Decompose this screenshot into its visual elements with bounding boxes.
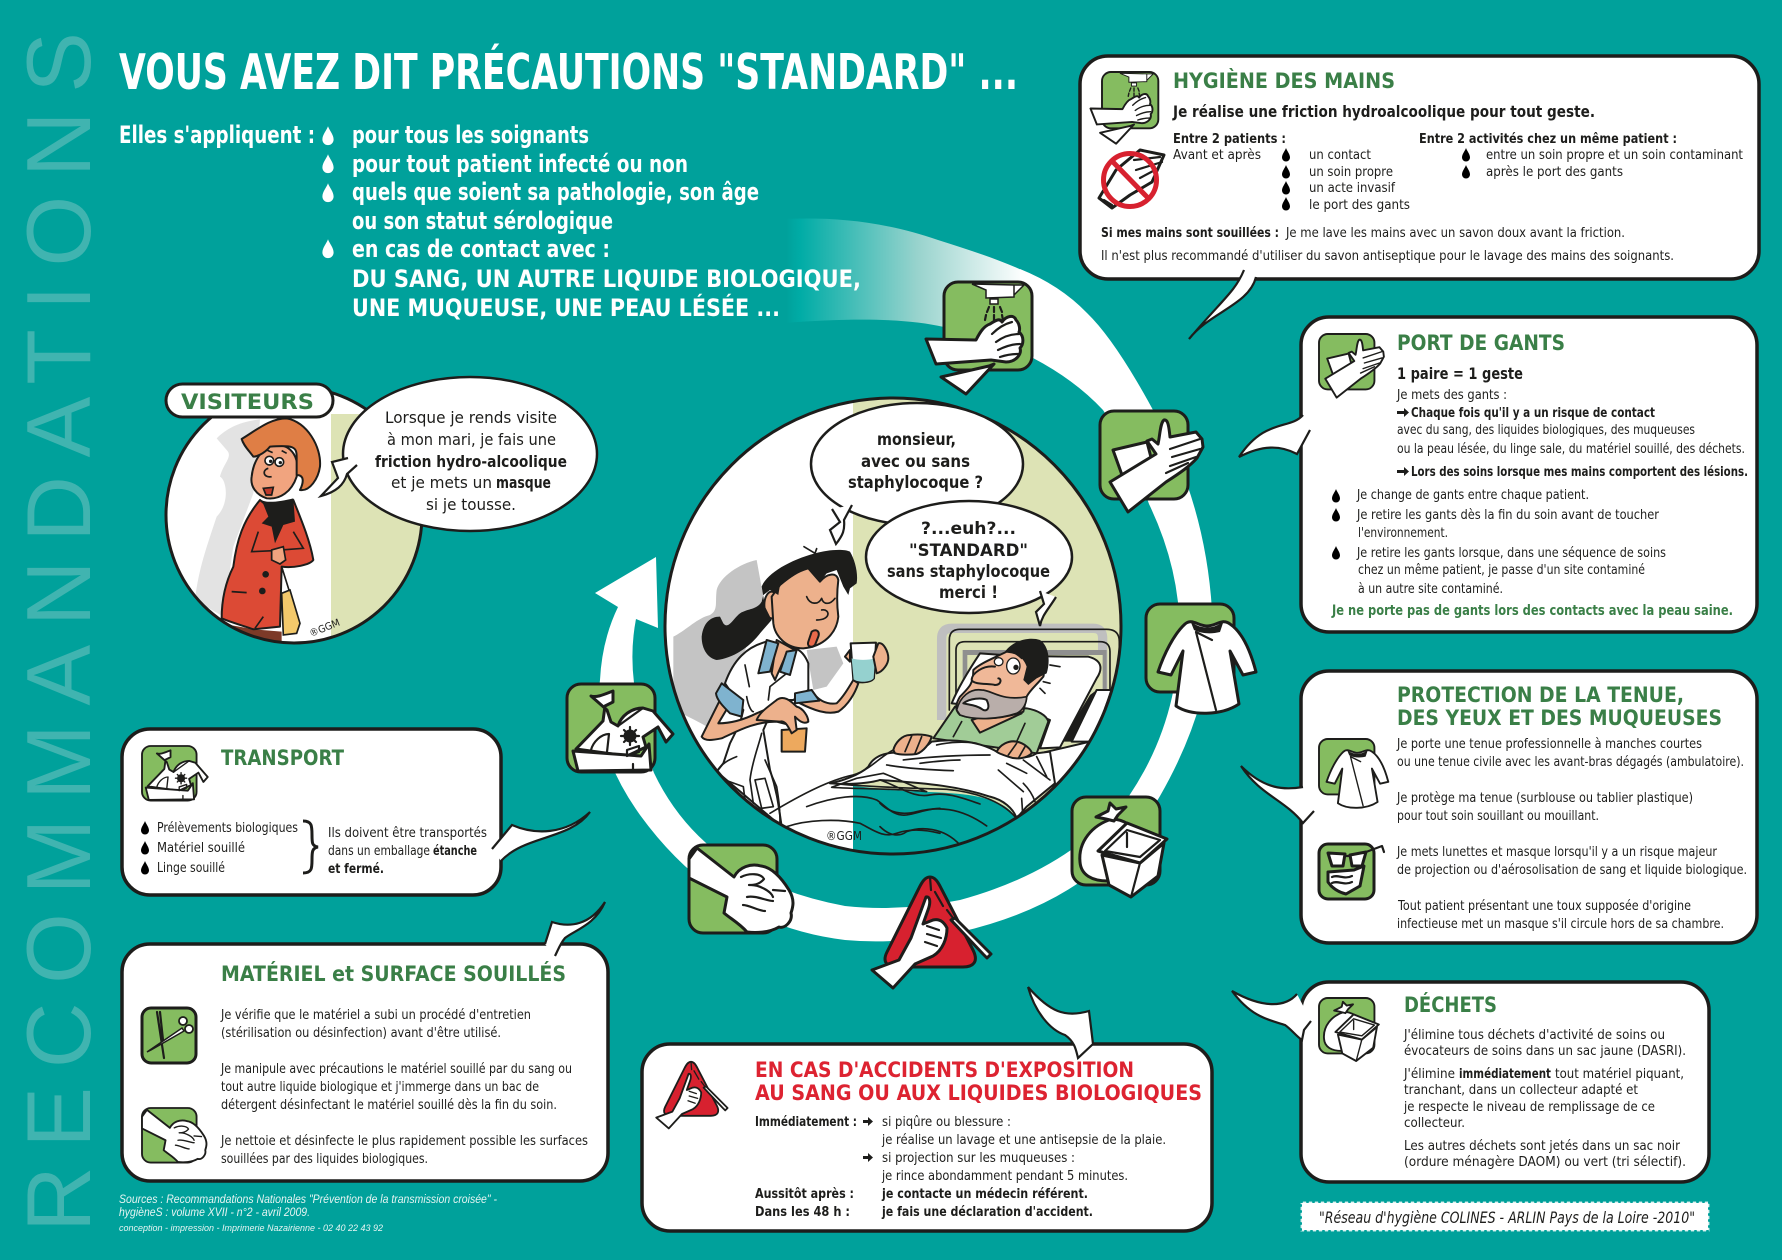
text block: waste rules: J'élimine [1403,1066,1455,1082]
text block: glove rules: Je change de gants entre chaque patient. [1356,487,1589,503]
text block: waste rules: collecteur. [1404,1115,1465,1131]
panel: déchets [1232,982,1709,1182]
text block: packaging: étanche [433,843,477,859]
text block: waste rules: tout matériel piquant, [1555,1066,1684,1082]
text block: items [141,820,298,876]
text block: equipment rules: Je vérifie que le matériel a subi un procédé d'entretien [220,1007,531,1023]
speech bubble: nurse: avec ou sans [861,452,970,472]
sources: Sources : Recommandations Nationales "Prévention de la transmission croisée" - [119,1194,497,1206]
text block: procedure: je rince abondamment pendant 5 minutes. [881,1168,1128,1184]
brace [303,821,318,873]
heading: MATÉRIEL et SURFACE SOUILLÉS [221,961,566,986]
icon: transport [142,746,208,801]
text block: protection rules: pour tout soin souillant ou mouillant. [1397,808,1599,824]
text block: entre 2 activités [1419,131,1743,180]
ring icon: coat [1146,604,1256,713]
text block: equipment rules: Je nettoie et désinfecte le plus rapidement possible les surfaces [220,1133,588,1149]
circular arrow: white ring with arrowhead [595,269,1212,941]
heading: EN CAS D'ACCIDENTS D'EXPOSITION [755,1058,1134,1082]
ring icon: gloves [1100,411,1203,512]
text block: protection rules: Je mets lunettes et masque lorsqu'il y a un risque majeur [1396,844,1717,860]
panel: protection de la tenue [1241,671,1757,943]
icon: no jewellery hands prohibited [1099,150,1164,208]
speech bubble: visitor [321,377,597,531]
text block: soiled hands: Si mes mains sont souillées : [1101,225,1279,241]
text block: when to wear: Je mets des gants : [1396,387,1507,403]
text block: waste rules: tranchant, dans un collecteur adapté et [1404,1082,1638,1098]
text block: equipment rules: tout autre liquide biologique et j'immerge dans un bac de [221,1079,539,1095]
credit box [1301,1202,1709,1231]
text block: waste rules: (ordure ménagère DAOM) ou vert (tri sélectif). [1404,1154,1686,1170]
speech bubble: nurse: monsieur, [877,430,956,450]
speech bubble: visitor: si je tousse. [426,495,516,514]
speech bubble: patient: merci ! [939,583,998,603]
text block: when to wear: Chaque fois qu'il y a un risque de contact [1411,405,1655,421]
text block: items: Linge souillé [157,860,225,876]
text block: protection rules [1396,736,1747,932]
ring icon: transport [567,684,673,772]
text block: protection rules: Je porte une tenue professionnelle à manches courtes [1396,736,1702,752]
speech bubble: patient: sans staphylocoque [887,562,1050,582]
text block: equipment rules: détergent désinfectant le matériel souillé dès la fin du soin. [221,1097,557,1113]
text block: when to wear: avec du sang, des liquides biologiques, des muqueuses [1397,422,1695,438]
heading: HYGIÈNE DES MAINS [1173,68,1395,93]
sources: conception - impression - Imprimerie Nazairienne - 02 40 22 43 92 [119,1223,384,1234]
text block: procedure: je fais une déclaration d'accident. [881,1204,1093,1220]
text block: equipment rules: souillées par des liquides biologiques. [221,1151,428,1167]
intro list: DU SANG, UN AUTRE LIQUIDE BIOLOGIQUE, [352,265,861,293]
intro list: ou son statut sérologique [352,207,613,235]
ring icon: cleaning hand [689,845,793,933]
intro list: Elles s'appliquent : [119,121,315,149]
text block: items: Matériel souillé [157,840,245,856]
panel: transport [122,729,590,895]
text block: soiled hands: Il n'est plus recommandé d'utiliser du savon antiseptique pour le lavage des mains des soignants. [1101,248,1674,264]
intro list: en cas de contact avec : [352,235,610,263]
text block: 1 paire = 1 geste: 1 paire = 1 geste [1397,364,1523,383]
heading [755,1058,1202,1105]
text block: entre 2 patients: un soin propre [1309,164,1393,180]
copyright mark: ®GGM [308,618,342,640]
icon: gloves [1319,334,1384,398]
text block: entre 2 patients: un contact [1309,147,1371,163]
ring icon: exposure accident [872,877,991,988]
text block: waste rules: je respecte le niveau de remplissage de ce [1403,1099,1655,1115]
text block: items: Prélèvements biologiques [157,820,298,836]
heading: PORT DE GANTS [1397,331,1565,355]
heading: DÉCHETS [1404,992,1497,1017]
circular arrow: swoosh from the intro text [784,218,1034,358]
text block: main rule: Je réalise une friction hydroalcoolique pour tout geste. [1172,102,1595,121]
icon: exposure accident [656,1062,728,1128]
speech bubble: patient [866,501,1072,626]
text block: entre 2 patients [1173,131,1410,213]
icon: glasses and mask [1319,844,1384,899]
text block: procedure: Aussitôt après : [755,1186,854,1202]
text block: protection rules: Je protège ma tenue (surblouse ou tablier plastique) [1396,790,1693,806]
intro list: quels que soient sa pathologie, son âge [352,178,759,206]
icon: waste [1319,998,1379,1061]
text block: waste rules: immédiatement [1459,1066,1551,1082]
text block: packaging [328,825,487,877]
speech bubble: nurse [811,403,1023,544]
text block: glove rules: Je retire les gants lorsque, dans une séquence de soins [1356,545,1666,561]
panel: hygiène des mains [1080,56,1759,339]
text block: procedure: Immédiatement : [755,1114,857,1130]
icon: coat [1319,739,1388,808]
text block: entre 2 activités: entre un soin propre et un soin contaminant [1486,147,1743,163]
heading [1397,683,1722,730]
text block: packaging: dans un emballage [328,843,430,859]
text block: waste rules [1403,1027,1686,1170]
sources [119,1194,497,1234]
text block: glove rules: l'environnement. [1358,525,1448,541]
text block: glove rules: chez un même patient, je passe d'un site contaminé [1358,562,1645,578]
heading: TRANSPORT [221,746,345,770]
text block: equipment rules [220,1007,588,1167]
text block: equipment rules: Je manipule avec précautions le matériel souillé par du sang ou [220,1061,572,1077]
text block: protection rules: Tout patient présentant une toux supposée d'origine [1397,898,1691,914]
heading: PROTECTION DE LA TENUE, [1397,683,1684,707]
text block: procedure: si piqûre ou blessure : [882,1114,1011,1130]
text block: entre 2 patients: un acte invasif [1309,180,1396,196]
text block: entre 2 patients: Entre 2 patients : [1173,131,1286,147]
text block: waste rules: Les autres déchets sont jetés dans un sac noir [1404,1138,1680,1154]
intro list [119,121,861,322]
speech bubble: visitor: masque [496,473,551,492]
speech bubble: patient: "STANDARD" [909,541,1028,561]
speech bubble: visitor: Lorsque je rends visite [385,408,557,427]
intro list: pour tous les soignants [352,121,589,149]
speech bubble: nurse: staphylocoque ? [848,473,983,493]
text block: soiled hands: Je me lave les mains avec un savon doux avant la friction. [1285,225,1625,241]
title: VOUS AVEZ DIT PRÉCAUTIONS "STANDARD" ... [119,42,1018,101]
intro list: pour tout patient infecté ou non [352,150,688,178]
icon: hand washing [1090,72,1158,144]
text block: packaging: et fermé. [328,861,384,877]
text block: procedure: Dans les 48 h : [755,1204,850,1220]
icon: instruments [142,1008,196,1063]
text block: procedure: si projection sur les muqueuses : [882,1150,1075,1166]
speech bubble: visitor: à mon mari, je fais une [387,430,556,449]
sources: hygièneS : volume XVII - n°2 - avril 2009. [119,1207,310,1219]
text block: entre 2 patients: le port des gants [1309,197,1410,213]
text block: procedure: je contacte un médecin référent. [881,1186,1088,1202]
text block: entre 2 activités: après le port des gants [1486,164,1623,180]
speech bubble: patient: ?...euh?... [921,519,1016,539]
text block: procedure [755,1114,1166,1220]
text block: equipment rules: (stérilisation ou désinfection) avant d'être utilisé. [221,1025,501,1041]
text block: soiled hands [1101,225,1674,264]
copyright mark: ®GGM [826,829,862,843]
text block: glove rules: à un autre site contaminé. [1358,581,1503,597]
ring icon: waste [1072,797,1167,897]
heading pill: visiteurs: VISITEURS [181,390,314,414]
text block: glove rules [1332,487,1666,597]
text block: when to wear [1396,387,1748,480]
panel: port de gants [1239,317,1757,632]
intro list: UNE MUQUEUSE, UNE PEAU LÉSÉE ... [352,293,780,322]
heading: AU SANG OU AUX LIQUIDES BIOLOGIQUES [755,1081,1202,1105]
text block: glove rules: Je retire les gants dès la fin du soin avant de toucher [1356,507,1659,523]
text block: entre 2 patients: Avant et après [1173,147,1261,163]
heading pill: visiteurs [166,384,333,417]
heading: DES YEUX ET DES MUQUEUSES [1397,706,1722,730]
panel: accidents d'exposition [642,987,1212,1231]
text block: procedure: je réalise un lavage et une antisepsie de la plaie. [881,1132,1166,1148]
text block: packaging: Ils doivent être transportés [328,825,487,841]
text block: waste rules: évocateurs de soins dans un sac jaune (DASRI). [1404,1043,1686,1059]
icon: cleaning hand [142,1108,206,1163]
vertical watermark: RECOMMANDATIONS: RECOMMANDATIONS [9,32,110,1232]
panel: visiteurs [160,377,597,650]
panel: matériel et surface souillés [122,902,608,1181]
text block: waste rules: J'élimine tous déchets d'activité de soins ou [1403,1027,1665,1043]
text block: entre 2 activités: Entre 2 activités chez un même patient : [1419,131,1677,147]
speech bubble: visitor: friction hydro-alcoolique [375,452,567,471]
central scene: nurse and patient [660,390,1133,867]
ring icon: hand washing [926,282,1032,394]
speech bubble: visitor: et je mets un [391,473,492,492]
